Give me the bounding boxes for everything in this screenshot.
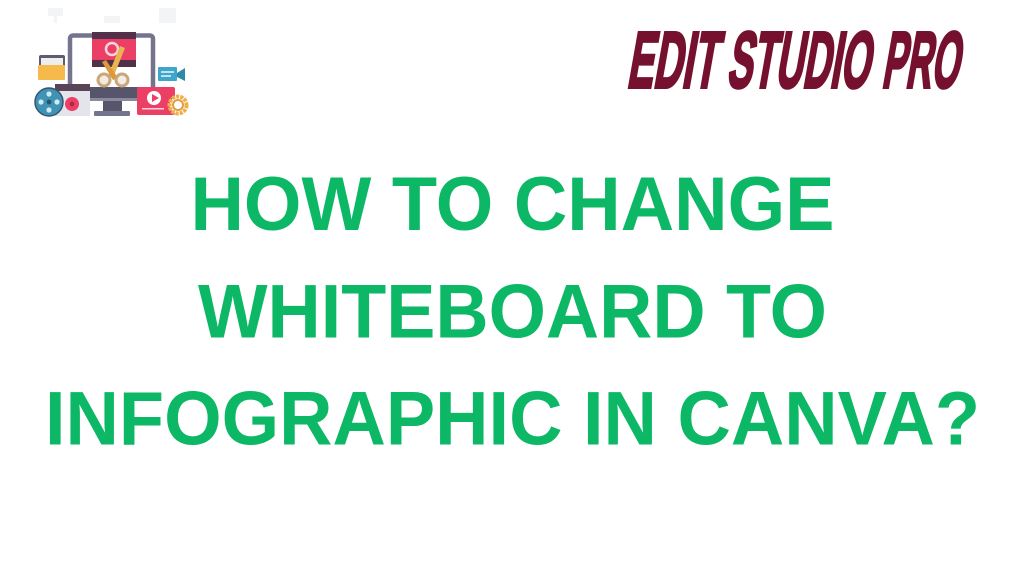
title line 3: INFOGRAPHIC IN CANVA? (45, 376, 980, 462)
pink video card (137, 87, 175, 115)
scissors (98, 46, 128, 86)
title (45, 162, 980, 462)
clapperboard (55, 84, 90, 116)
faint ghost icons (48, 8, 176, 23)
film strip with play symbol (92, 32, 136, 67)
brand name: EDIT (623, 16, 729, 105)
monitor (70, 36, 153, 116)
film reel (35, 88, 63, 116)
folder (38, 55, 65, 80)
gear (170, 96, 186, 114)
video camera (158, 67, 185, 81)
logo icon: video editing illustration (35, 8, 186, 116)
brand name (623, 16, 971, 105)
title line 1: HOW TO CHANGE (190, 162, 834, 247)
title line 2: WHITEBOARD TO (198, 270, 827, 354)
